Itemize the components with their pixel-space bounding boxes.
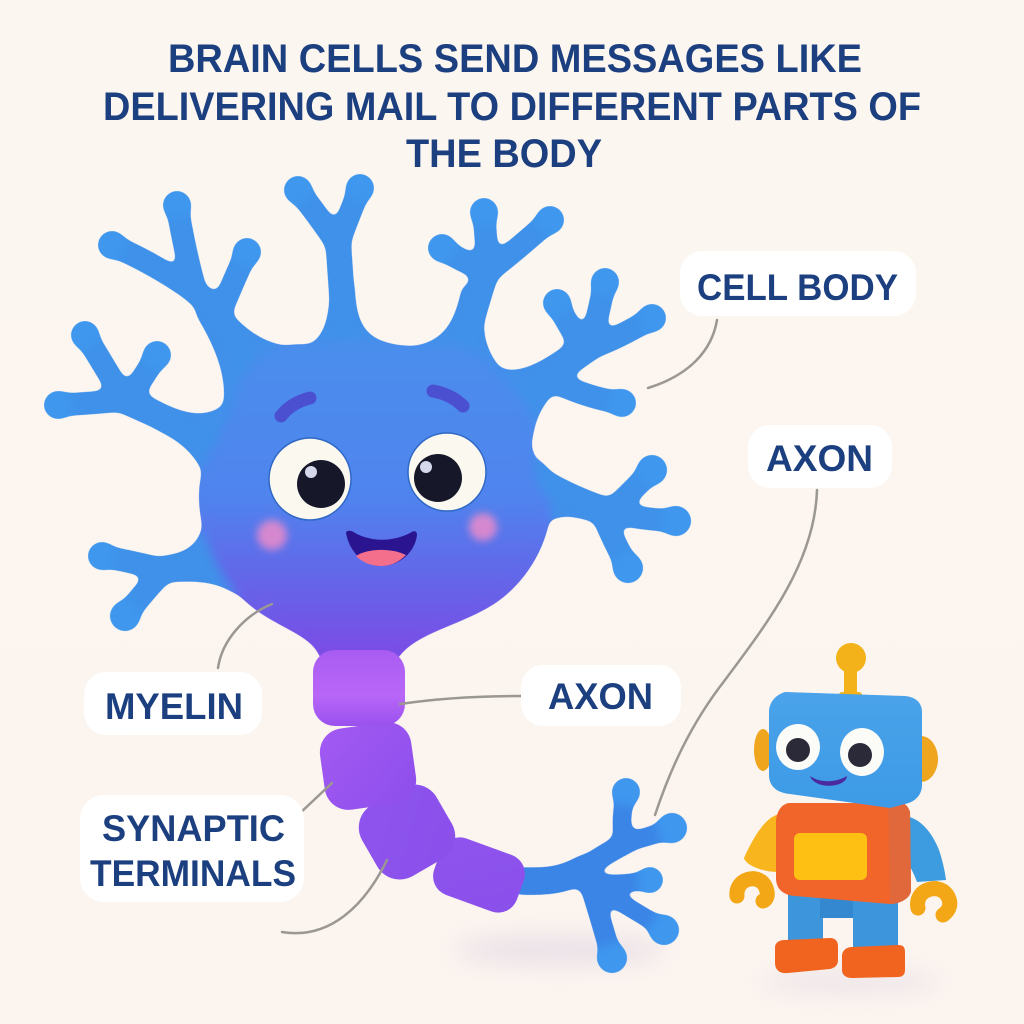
right eye xyxy=(408,433,486,511)
robot legs xyxy=(788,890,898,949)
label: cell body xyxy=(680,251,916,316)
label: myelin xyxy=(84,672,262,735)
title: THE BODY xyxy=(406,132,602,176)
robot antenna xyxy=(836,643,866,698)
connector lines xyxy=(218,320,817,933)
neuron cell xyxy=(44,174,691,662)
label: axon upper: AXON xyxy=(766,438,873,479)
title: DELIVERING MAIL TO DIFFERENT PARTS OF xyxy=(103,85,921,129)
eyebrows xyxy=(281,391,463,416)
label: axon lower: AXON xyxy=(548,676,653,717)
robot eyes xyxy=(776,724,884,776)
blush cheeks xyxy=(257,513,497,550)
label: synaptic terminals: SYNAPTIC xyxy=(102,808,285,849)
robot character xyxy=(737,643,950,978)
robot right arm xyxy=(898,816,946,882)
label: cell body: CELL BODY xyxy=(697,267,898,308)
robot feet xyxy=(775,938,905,978)
label: axon lower xyxy=(521,665,681,726)
robot head xyxy=(769,692,922,808)
title xyxy=(103,37,921,176)
robot hands xyxy=(737,879,950,915)
synaptic terminal branches xyxy=(520,778,687,973)
myelin segment 3 xyxy=(349,775,465,889)
label: myelin: MYELIN xyxy=(105,686,243,727)
ground shadows xyxy=(455,936,940,990)
robot left arm xyxy=(744,814,780,872)
robot body xyxy=(776,803,911,904)
label: axon upper xyxy=(748,425,892,488)
title: BRAIN CELLS SEND MESSAGES LIKE xyxy=(168,37,862,81)
axon with myelin segments xyxy=(313,650,531,918)
smiling mouth xyxy=(346,531,417,566)
body and dendrites silhouette xyxy=(44,174,691,662)
left eye xyxy=(269,438,351,520)
myelin segment 1 xyxy=(313,650,405,726)
robot ears xyxy=(754,729,938,782)
myelin segment 4 xyxy=(427,832,531,918)
robot mouth xyxy=(810,776,847,786)
myelin segment 2 xyxy=(317,719,419,813)
label: synaptic terminals xyxy=(80,795,304,902)
label: synaptic terminals: TERMINALS xyxy=(90,853,296,894)
